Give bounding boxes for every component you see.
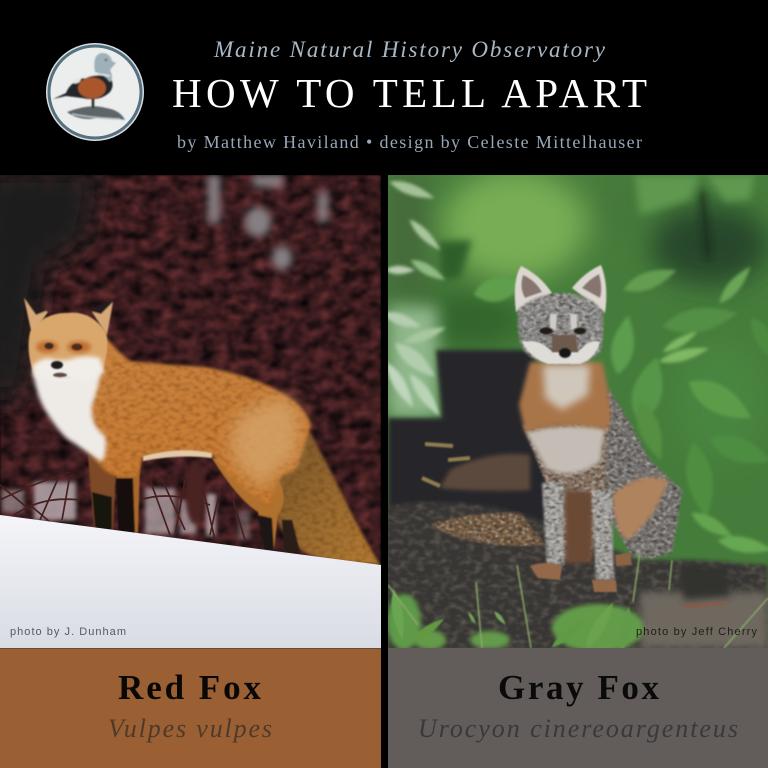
eyes and nose bbox=[540, 327, 586, 358]
legs bbox=[88, 455, 300, 552]
title: HOW TO TELL APART bbox=[172, 70, 647, 116]
heading: gray fox: Gray Fox bbox=[498, 668, 660, 707]
tail bbox=[431, 513, 545, 546]
body bbox=[70, 335, 311, 505]
ground: black fabric and soil bbox=[388, 350, 768, 650]
background: foliage bbox=[381, 170, 768, 557]
icon: observatory duck logo bbox=[46, 43, 144, 141]
panel: gray fox photo bbox=[381, 170, 768, 655]
header background bbox=[0, 0, 768, 175]
panel: red fox photo bbox=[0, 170, 381, 648]
belly bbox=[523, 420, 608, 560]
latin name: vulpes vulpes: Vulpes vulpes bbox=[108, 714, 272, 743]
tail bbox=[270, 432, 380, 565]
fox: gray fox bbox=[431, 265, 682, 592]
paws bbox=[530, 552, 632, 592]
panel: red fox name bbox=[0, 648, 381, 768]
heading: red fox: Red Fox bbox=[118, 668, 262, 707]
byline: by Matthew Haviland • design by Celeste Mittelhauser bbox=[177, 132, 642, 152]
photo credit: photo by J. Dunham bbox=[10, 626, 126, 638]
head bbox=[29, 313, 107, 378]
chest bbox=[519, 362, 611, 432]
fox: red fox bbox=[24, 298, 380, 565]
subtitle: organisation: Maine Natural History Observatory bbox=[213, 37, 606, 62]
white chest bbox=[33, 370, 106, 462]
ears bbox=[24, 298, 113, 335]
snow bank bbox=[0, 515, 381, 648]
eyes and nose bbox=[44, 343, 82, 377]
background: winter shrubs bbox=[0, 170, 381, 575]
foreground grass bbox=[387, 552, 768, 655]
head bbox=[518, 293, 603, 364]
panel: gray fox name bbox=[388, 648, 768, 768]
photo credit: photo by Jeff Cherry bbox=[636, 626, 758, 638]
ears bbox=[515, 265, 606, 313]
hindquarters bbox=[600, 385, 682, 558]
forelegs bbox=[542, 483, 614, 580]
latin name: urocyon cinereoargenteus: Urocyon cinereoargenteus bbox=[418, 714, 738, 743]
